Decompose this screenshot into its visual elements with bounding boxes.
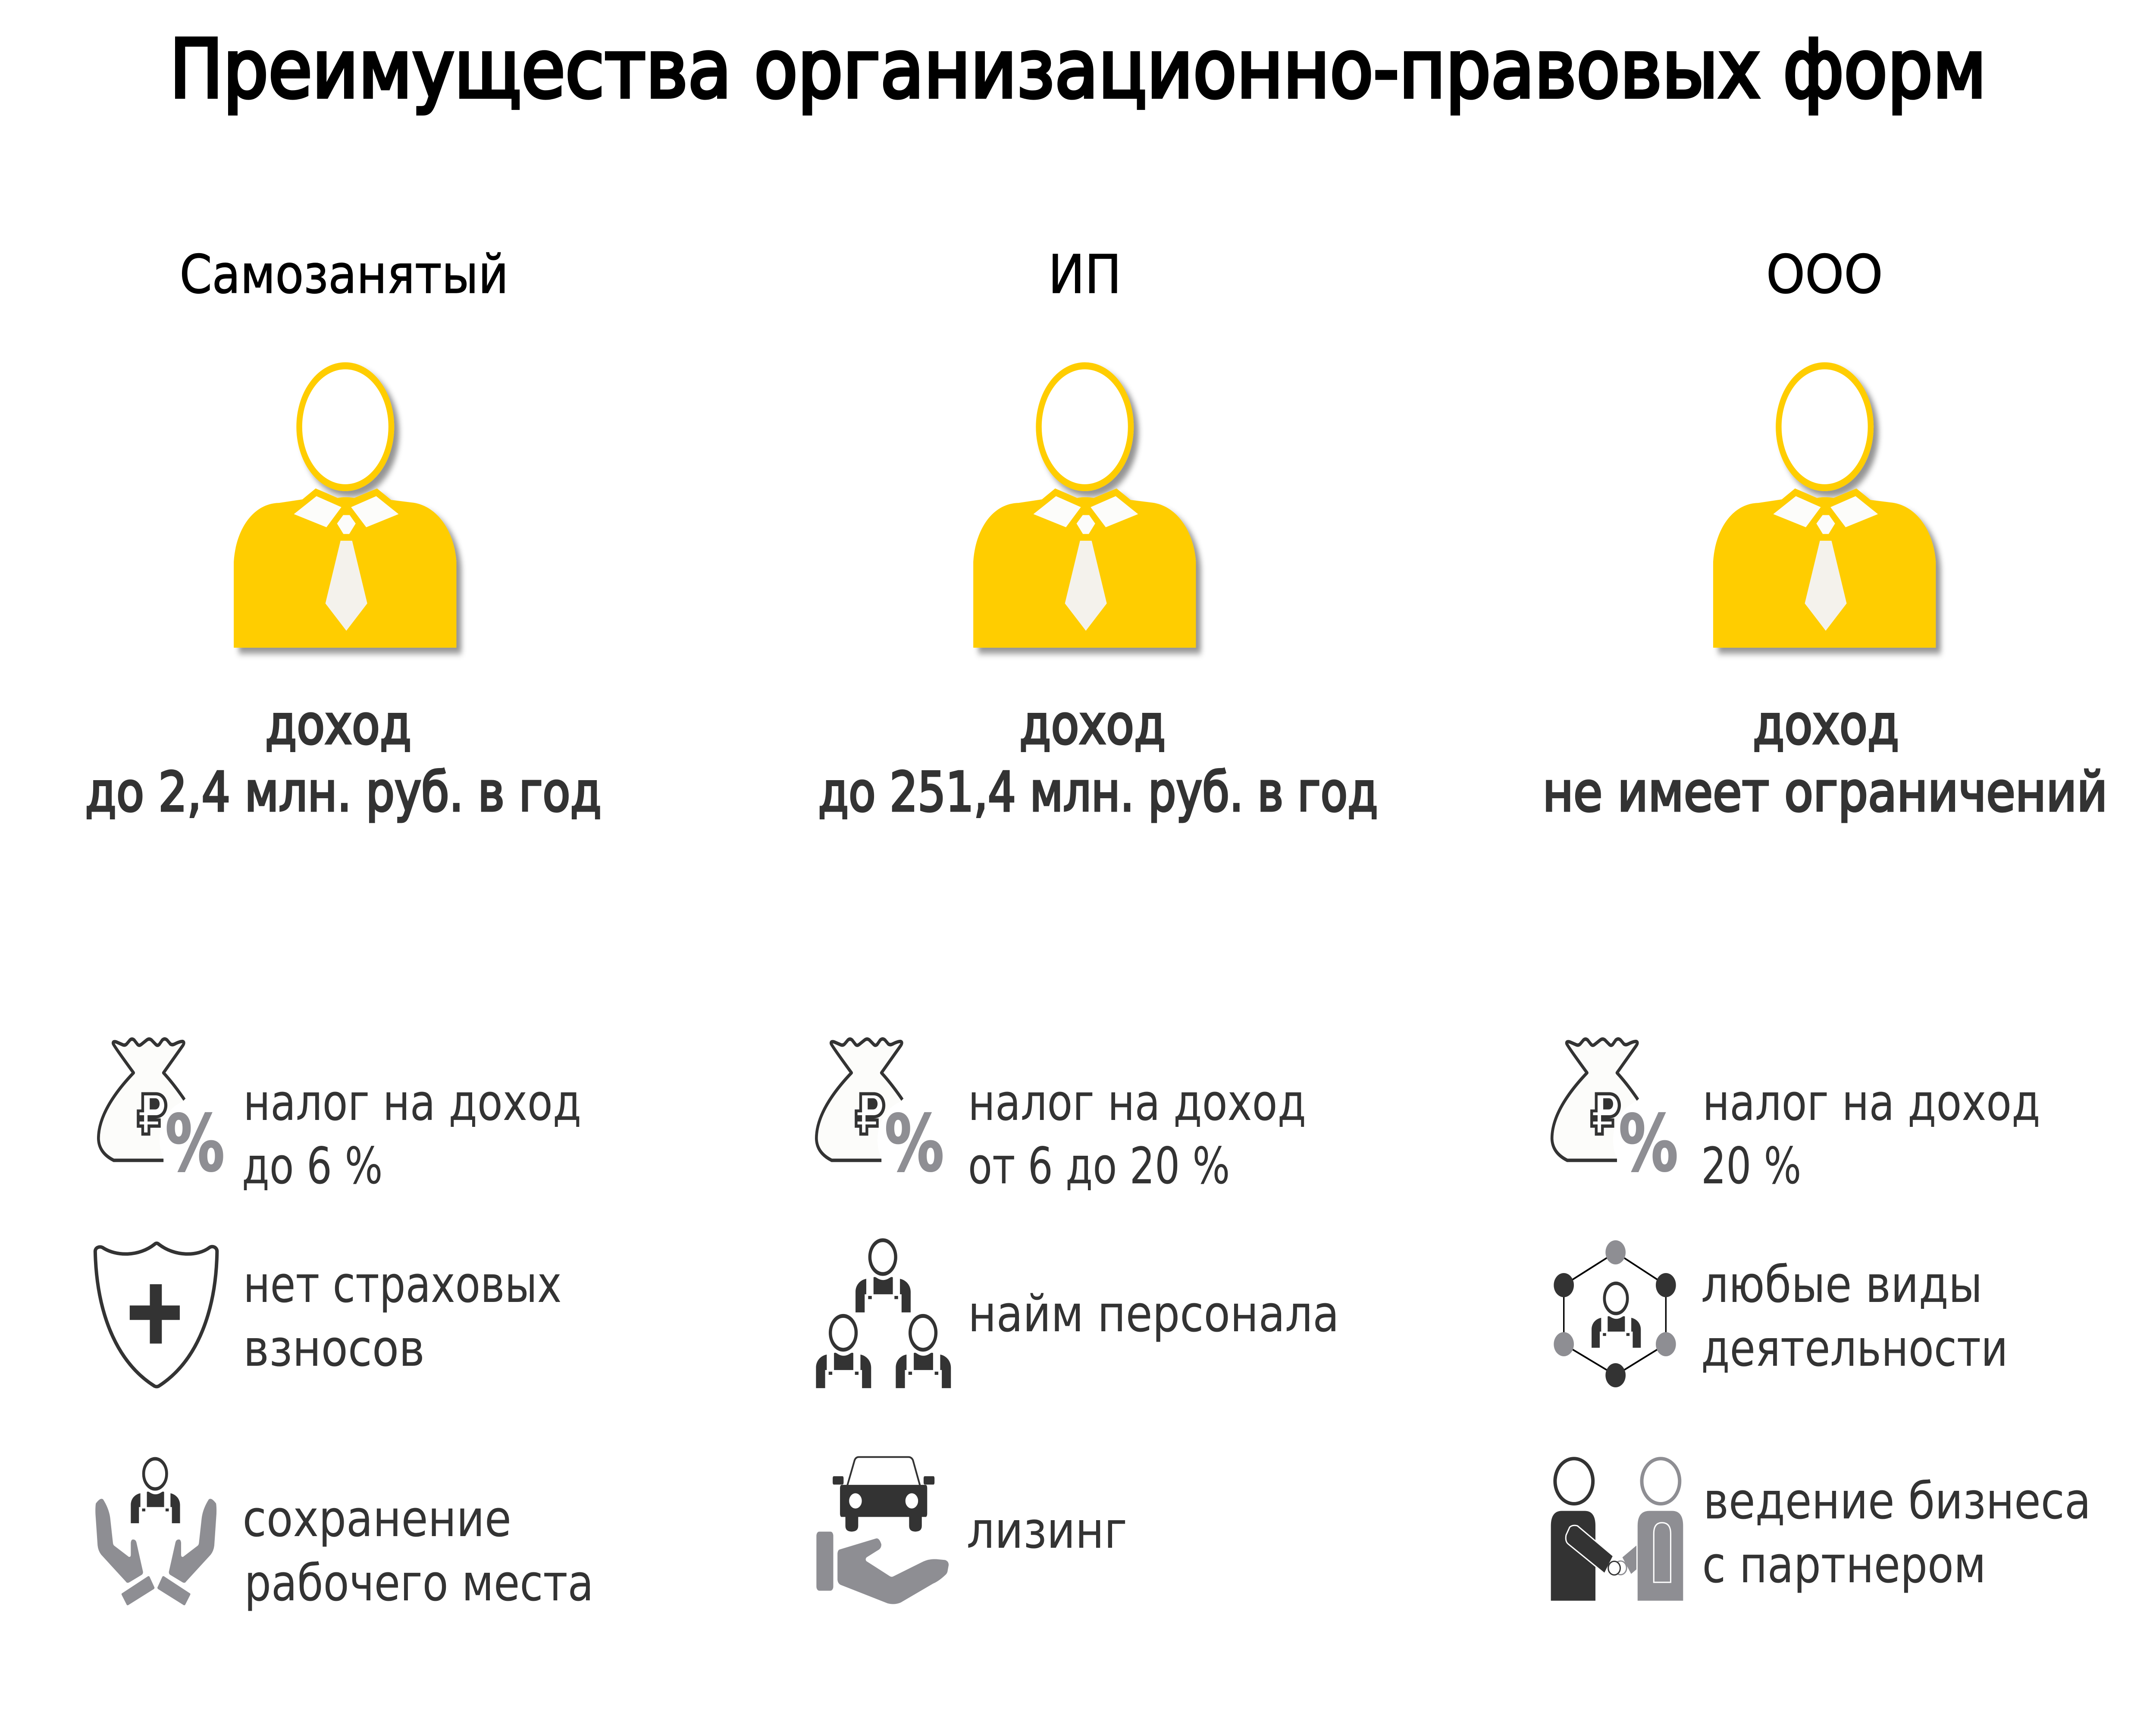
icon: yellow person with tie: [1713, 366, 1936, 648]
icon: yellow person with tie: [234, 366, 456, 648]
income limit text: не имеет ограничений: [1543, 761, 2108, 824]
panel: ИП: [816, 244, 1378, 1604]
text: keeping a job: сохранение: [243, 1490, 511, 1548]
icon: yellow person with tie: [973, 366, 1196, 648]
icon: money bag with percent: [1552, 1039, 1680, 1189]
text: tax rate: [1701, 1073, 2040, 1195]
icon: money bag with percent: %: [165, 1099, 225, 1189]
text: any kinds of activity: любые виды: [1701, 1255, 1983, 1314]
income limit text: доход: [1753, 693, 1899, 756]
income limit text: доход: [265, 693, 411, 756]
panel: ООО: [1543, 244, 2108, 1601]
icon: money bag with percent: %: [1619, 1099, 1678, 1189]
text: tax rate: 20 %: [1701, 1137, 1802, 1195]
text: partnership business: с партнером: [1702, 1536, 1986, 1594]
text: any kinds of activity: [1701, 1255, 2008, 1378]
income limit text: доход: [1019, 693, 1166, 756]
text: tax rate: от 6 до 20 %: [968, 1137, 1230, 1195]
panel: Самозанятый: [85, 244, 602, 1612]
icon: hands holding a worker: [95, 1459, 216, 1605]
income limit text: [1543, 693, 2108, 824]
text: tax rate: налог на доход: [968, 1073, 1306, 1132]
column heading: Самозанятый: Самозанятый: [180, 244, 508, 305]
icon: worker in a network hexagon: [1554, 1240, 1676, 1387]
title: Преимущества организационно-правовых форм: [169, 22, 1987, 116]
column heading: ИП: ИП: [1048, 244, 1122, 305]
text: partnership business: ведение бизнеса: [1703, 1472, 2091, 1531]
text: no insurance contributions: нет страховых: [243, 1255, 561, 1314]
income limit text: [818, 693, 1378, 824]
text: partnership business: [1702, 1472, 2091, 1594]
income limit text: до 2,4 млн. руб. в год: [85, 761, 602, 824]
text: any kinds of activity: деятельности: [1701, 1319, 2008, 1378]
text: tax rate: до 6 %: [242, 1137, 383, 1195]
text: tax rate: [242, 1073, 581, 1195]
text: tax rate: налог на доход: [243, 1073, 581, 1132]
text: keeping a job: рабочего места: [244, 1554, 594, 1612]
text: keeping a job: [243, 1490, 594, 1612]
icon: money bag with percent: [816, 1039, 945, 1189]
text: tax rate: налог на доход: [1702, 1073, 2040, 1132]
text: hiring staff: найм персонала: [968, 1285, 1339, 1343]
income limit text: до 251,4 млн. руб. в год: [818, 761, 1378, 824]
icon: money bag with percent: [98, 1039, 227, 1189]
icon: three workers: [816, 1240, 951, 1388]
column heading: ООО: ООО: [1766, 244, 1883, 305]
icon: shield with cross: [95, 1243, 217, 1386]
income limit text: [85, 693, 602, 824]
icon: car on a hand: [816, 1457, 949, 1604]
icon: money bag with percent: %: [885, 1099, 944, 1189]
text: no insurance contributions: [243, 1255, 561, 1378]
text: no insurance contributions: взносов: [243, 1319, 425, 1378]
text: leasing: лизинг: [967, 1501, 1127, 1560]
icon: two people shaking hands: [1551, 1458, 1683, 1601]
text: tax rate: [968, 1073, 1306, 1195]
